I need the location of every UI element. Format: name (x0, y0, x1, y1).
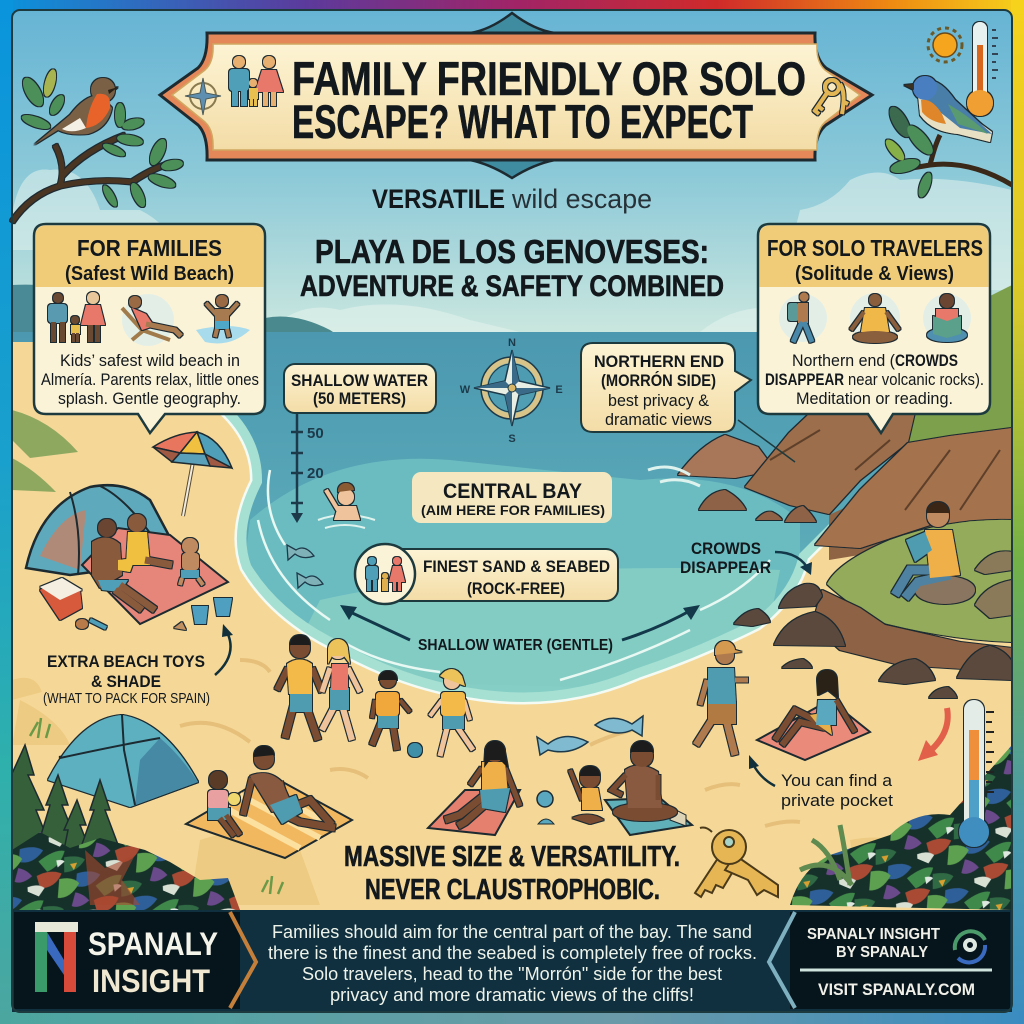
rocky cliffs and green headland (648, 285, 1012, 698)
icon: compass rose small (185, 78, 221, 115)
swimmer and fish (287, 483, 375, 588)
red arrow (918, 708, 948, 761)
umbrella (153, 432, 232, 516)
panel: for families (34, 224, 265, 433)
body text: families: splash. Gentle geography. (58, 389, 241, 408)
subtitle: wild escape (511, 184, 652, 214)
title text: ESCAPE? WHAT TO EXPECT (292, 95, 753, 148)
seated child and man (570, 741, 692, 835)
label: extra beach toys: EXTRA BEACH TOYS (47, 652, 205, 671)
title plaque (160, 13, 872, 178)
callout: shallow water: SHALLOW WATER (291, 371, 428, 390)
callout: northern end: dramatic views (605, 411, 712, 429)
callout: shallow water (284, 364, 436, 413)
icon: parent relaxing (122, 294, 181, 346)
adults and child on blanket (92, 514, 203, 610)
heading: solo: FOR SOLO TRAVELERS (767, 235, 983, 261)
main heading: PLAYA DE LOS GENOVESES: (315, 233, 709, 270)
label: private pocket: private pocket (781, 791, 893, 810)
heading: for families: FOR FAMILIES (77, 235, 222, 261)
callout: finest sand: FINEST SAND & SEABED (423, 557, 610, 576)
depth ruler (291, 414, 324, 523)
logo block: SPANALY (88, 926, 218, 962)
body text: solo: DISAPPEAR (765, 370, 844, 389)
label: crowds disappear: CROWDS (691, 539, 761, 558)
label: crowds disappear (680, 539, 812, 577)
logo block: INSIGHT (92, 963, 210, 999)
callout: northern end: NORTHERN END (594, 352, 724, 371)
icon: keys (814, 80, 848, 114)
sun and top thermometer (928, 22, 998, 116)
icon: cooler (40, 578, 82, 620)
label: shallow water gentle: SHALLOW WATER (GENTLE) (418, 637, 613, 654)
icon: compass rose: N (508, 337, 516, 349)
closing statement (344, 841, 680, 906)
icon: family (229, 56, 283, 106)
callout: finest sand: (ROCK-FREE) (467, 579, 565, 598)
icon: meditating figure (850, 293, 900, 343)
heading: for families (65, 235, 234, 285)
icon: golden key (695, 828, 778, 897)
icon: splashing child (196, 295, 250, 344)
subtitle (372, 184, 652, 214)
body text: solo: near volcanic rocks). (848, 370, 984, 389)
callout: finest sand (355, 544, 618, 604)
footer bar (12, 910, 1012, 1012)
icon: thermometer top (967, 22, 993, 116)
icon: compass rose: S (508, 433, 516, 445)
callout: central bay: (AIM HERE FOR FAMILIES) (421, 502, 605, 518)
icon: thermometer lower (959, 700, 989, 847)
title text (292, 52, 806, 148)
family on striped towel (186, 746, 352, 858)
label: private pocket (749, 755, 893, 810)
callout: central bay (412, 472, 612, 523)
footer advice text: Solo travelers, head to the "Morrón" side for the best (302, 964, 722, 984)
fish on sand (537, 716, 643, 755)
icon: compass rose (460, 337, 563, 445)
depth ruler: 20 (307, 465, 324, 482)
main heading: ADVENTURE & SAFETY COMBINED (300, 270, 724, 303)
footer advice text (268, 922, 757, 1005)
title text: FAMILY FRIENDLY OR SOLO (292, 52, 806, 105)
heading: solo: (Solitude & Views) (795, 263, 954, 285)
foliage and thermometer lower right (790, 700, 1012, 910)
heading: solo (767, 235, 983, 285)
label: crowds disappear: DISAPPEAR (680, 558, 771, 577)
icon: family trio (48, 292, 105, 342)
icon: sun (928, 28, 962, 62)
label: shallow water gentle (340, 605, 700, 654)
walker and woman on towel (696, 641, 870, 760)
callout: shallow water: (50 METERS) (313, 389, 406, 408)
tent lower left (48, 715, 198, 807)
body text: solo: Northern end ( (792, 351, 895, 370)
callout: central bay: CENTRAL BAY (443, 480, 582, 503)
body text: solo: CROWDS (895, 351, 958, 370)
woman on pink towel (428, 741, 554, 835)
brand block: VISIT SPANALY.COM (818, 980, 975, 999)
icon: hiker (779, 292, 827, 342)
label: private pocket: You can find a (781, 771, 893, 790)
family camp under shelter (26, 485, 232, 630)
icon: buckets and toys (76, 598, 232, 630)
body text: solo (765, 351, 984, 408)
heading: for families: (Safest Wild Beach) (65, 263, 234, 285)
foliage lower left (0, 745, 240, 910)
callout: northern end (581, 343, 795, 462)
label: extra beach toys (43, 624, 233, 707)
icon: logo mark (35, 922, 78, 992)
icon: reader (923, 294, 971, 342)
bird on right branch (883, 76, 1012, 199)
panel: for solo travelers (758, 224, 990, 433)
footer advice text: Families should aim for the central part of the bay. The sand (272, 922, 752, 942)
logo block (14, 912, 256, 1009)
walking family (277, 635, 473, 757)
body text: families (41, 351, 259, 408)
icon: brand swirl (955, 931, 985, 962)
label: extra beach toys: & SHADE (91, 672, 161, 691)
icon: compass rose: E (555, 384, 563, 396)
footer advice text: privacy and more dramatic views of the cliffs! (330, 985, 694, 1005)
main heading (300, 233, 724, 303)
subtitle: VERSATILE (372, 184, 505, 214)
grass tufts (30, 718, 283, 894)
reader on rock (895, 502, 975, 604)
body text: families: Kids’ safest wild beach in (60, 351, 240, 370)
brand block: BY SPANALY (836, 944, 928, 961)
bird on left branch (12, 68, 184, 222)
body text: families: Almería. Parents relax, little ones (41, 370, 259, 389)
closing statement: NEVER CLAUSTROPHOBIC. (365, 874, 660, 906)
brand block: SPANALY INSIGHT (807, 926, 940, 943)
callout: northern end: best privacy & (608, 392, 709, 410)
body text: solo: Meditation or reading. (796, 389, 953, 408)
brand block (769, 912, 1010, 1009)
icon: compass rose: W (460, 384, 471, 396)
closing statement: MASSIVE SIZE & VERSATILITY. (344, 841, 680, 873)
footer advice text: there is the finest and the seabed is completely free of rocks. (268, 943, 757, 963)
depth ruler: 50 (307, 425, 324, 442)
label: extra beach toys: (WHAT TO PACK FOR SPAIN) (43, 691, 210, 707)
callout: northern end: (MORRÓN SIDE) (601, 371, 716, 390)
